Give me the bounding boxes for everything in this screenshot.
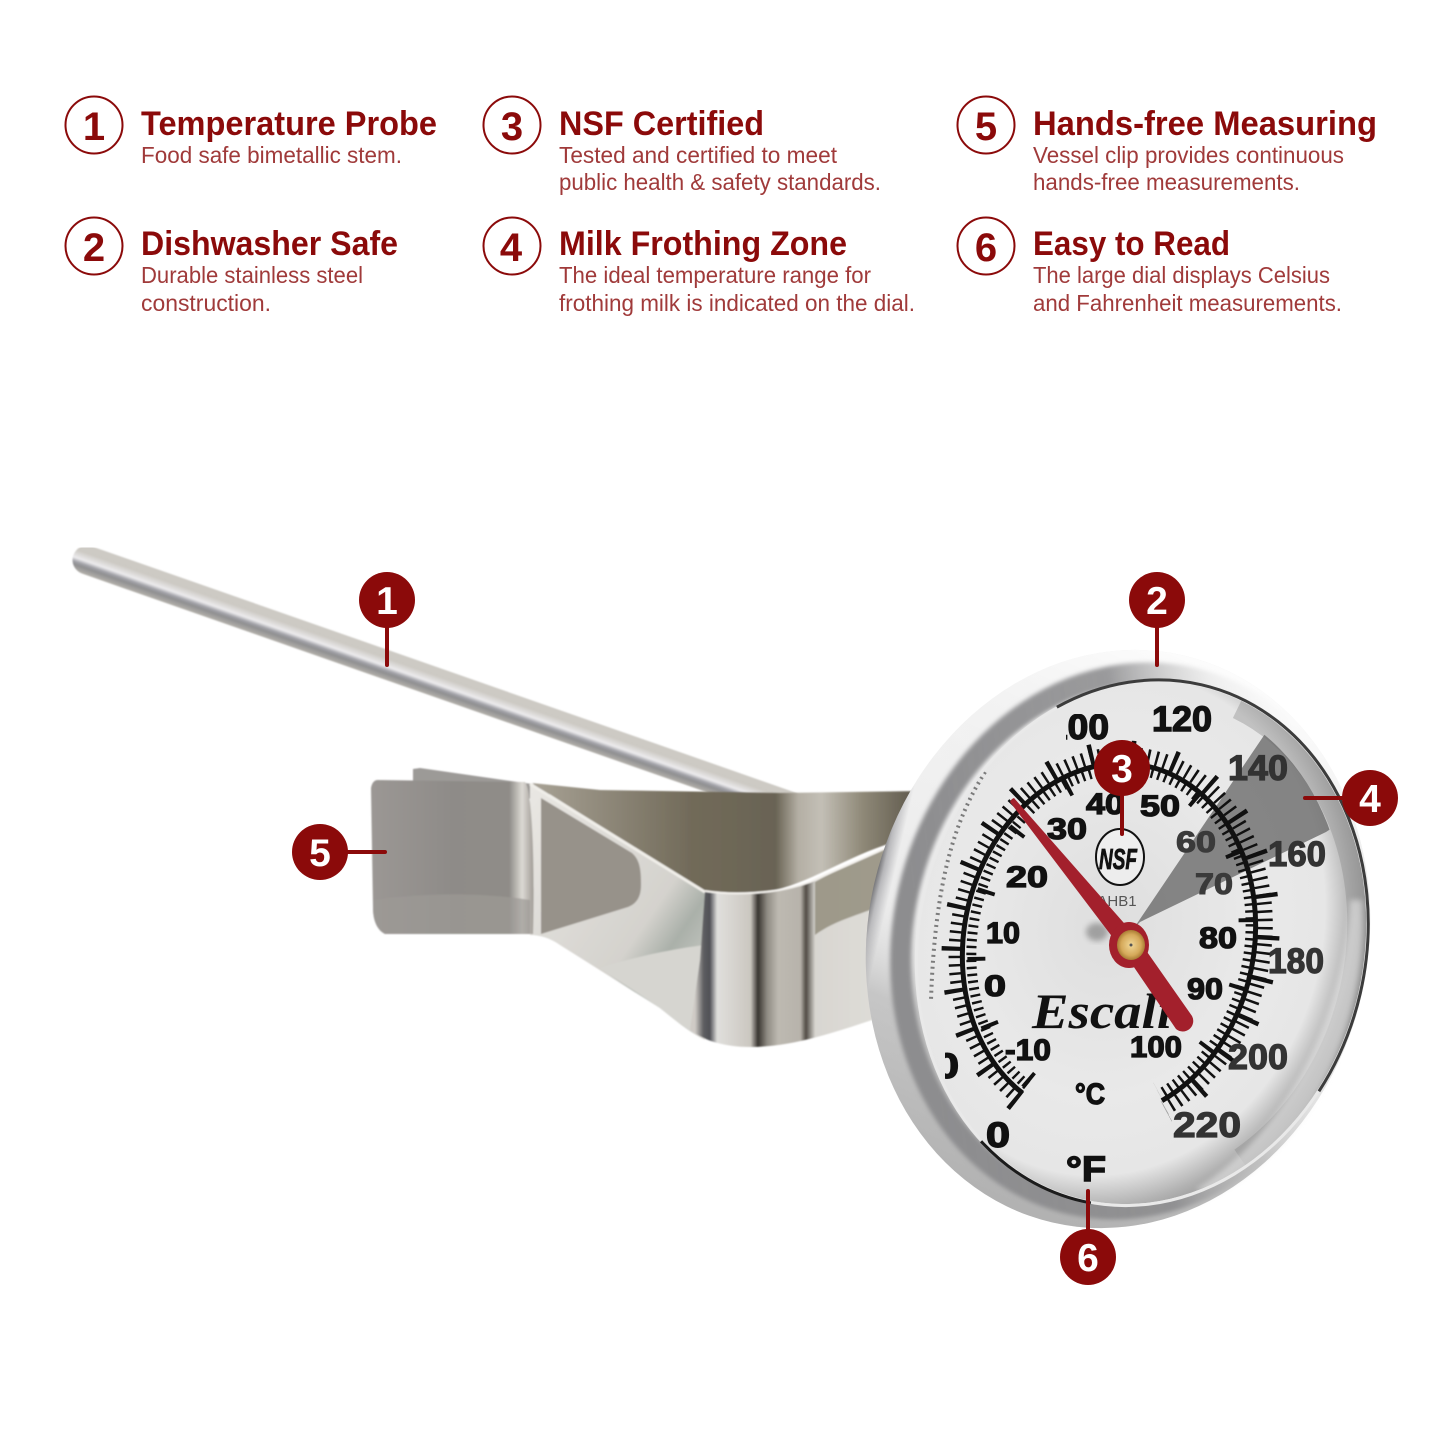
fahrenheit labels: 100 [1047, 708, 1109, 747]
probe stem [87, 560, 790, 806]
fahrenheit labels: 200 [1228, 1038, 1288, 1077]
fahrenheit labels: 0 [935, 1047, 959, 1086]
feature 4: milk frothing zone: The ideal temperature range for [559, 262, 871, 288]
celsius labels: 50 [1140, 790, 1180, 823]
celsius labels: -10 [1005, 1034, 1051, 1067]
callout 2: bezel: 2 [1146, 580, 1168, 623]
fahrenheit labels: °F [1066, 1150, 1106, 1189]
feature 4: milk frothing zone: frothing milk is indicated on the dial. [559, 290, 915, 316]
feature 5: hands-free measuring [958, 96, 1377, 195]
tick reflection on glass [931, 772, 985, 1000]
celsius labels: 10 [986, 917, 1020, 950]
feature 2: dishwasher safe: Dishwasher Safe [141, 225, 398, 263]
feature 3: NSF certified [484, 96, 881, 195]
feature 1: temperature probe [66, 96, 437, 168]
feature 1: temperature probe: Food safe bimetallic stem. [141, 142, 402, 168]
fahrenheit labels: 120 [1152, 700, 1212, 739]
glass reflection [1195, 900, 1363, 1195]
feature 6: easy to read: and Fahrenheit measurements. [1033, 290, 1342, 316]
fahrenheit labels: 160 [1268, 835, 1326, 874]
fahrenheit labels: 140 [1228, 749, 1288, 788]
feature 4: milk frothing zone [484, 218, 915, 316]
feature 3: NSF certified: NSF Certified [559, 105, 764, 143]
dial bezel [809, 599, 1427, 1279]
thermometer photo [87, 560, 1427, 1279]
feature 2: dishwasher safe: 2 [83, 226, 105, 270]
feature 6: easy to read: Easy to Read [1033, 225, 1230, 263]
feature 5: hands-free measuring: Hands-free Measuring [1033, 105, 1377, 143]
feature 3: NSF certified: public health & safety standards. [559, 169, 881, 195]
vessel clip [371, 768, 918, 1047]
feature 5: hands-free measuring: 5 [975, 105, 997, 149]
NSF logo [1096, 829, 1144, 910]
milk frothing zone wedge [1136, 734, 1330, 924]
feature 5: hands-free measuring: Vessel clip provides continuous [1033, 142, 1344, 168]
celsius labels [984, 788, 1237, 1111]
celsius labels: 100 [1130, 1031, 1182, 1064]
fahrenheit labels: 220 [1173, 1106, 1241, 1145]
callout 5: clip [292, 824, 385, 880]
callout 1: stem: 1 [376, 580, 398, 623]
callout 2: bezel [1129, 572, 1185, 665]
celsius labels: 0 [984, 970, 1006, 1003]
celsius labels: 30 [1047, 813, 1087, 846]
feature list [66, 96, 1377, 316]
dial face [929, 688, 1366, 1204]
feature 6: easy to read: The large dial displays Celsius [1033, 262, 1330, 288]
celsius labels: 20 [1006, 861, 1048, 894]
callout 4: frothing zone [1305, 770, 1398, 826]
callout 3: NSF: 3 [1111, 748, 1133, 791]
fahrenheit labels: 0 [986, 1116, 1010, 1155]
celsius labels: °C [1075, 1078, 1105, 1111]
fahrenheit labels [935, 700, 1326, 1189]
celsius labels: 40 [1086, 788, 1124, 821]
feature 4: milk frothing zone: Milk Frothing Zone [559, 225, 847, 263]
feature 1: temperature probe: 1 [83, 105, 105, 149]
NSF logo: AHB1 [1097, 893, 1137, 910]
feature 6: easy to read [958, 218, 1342, 316]
callout 6: dial readout [1060, 1191, 1116, 1285]
celsius labels: 90 [1187, 973, 1223, 1006]
feature 2: dishwasher safe: Durable stainless steel [141, 262, 363, 288]
feature 2: dishwasher safe: construction. [141, 290, 271, 316]
feature 5: hands-free measuring: hands-free measurements. [1033, 169, 1300, 195]
Escali brand: Escali [1031, 983, 1172, 1039]
feature 3: NSF certified: Tested and certified to meet [559, 142, 837, 168]
feature 4: milk frothing zone: 4 [500, 226, 523, 270]
celsius labels: 60 [1176, 826, 1216, 859]
needle [1010, 798, 1193, 1031]
tick scale [942, 740, 1280, 1122]
NSF logo: NSF [1099, 844, 1138, 876]
feature 2: dishwasher safe [66, 218, 398, 316]
fahrenheit labels: 180 [1268, 942, 1324, 981]
feature 3: NSF certified: 3 [501, 105, 523, 149]
celsius labels: 80 [1199, 922, 1237, 955]
callout 1: stem [359, 572, 415, 665]
feature 1: temperature probe: Temperature Probe [141, 105, 437, 143]
callout 3: NSF [1094, 740, 1150, 834]
callout 4: frothing zone: 4 [1359, 778, 1381, 821]
feature 6: easy to read: 6 [975, 226, 997, 270]
callout 5: clip: 5 [309, 832, 331, 875]
callout 6: dial readout: 6 [1077, 1237, 1099, 1280]
celsius labels: 70 [1195, 868, 1233, 901]
